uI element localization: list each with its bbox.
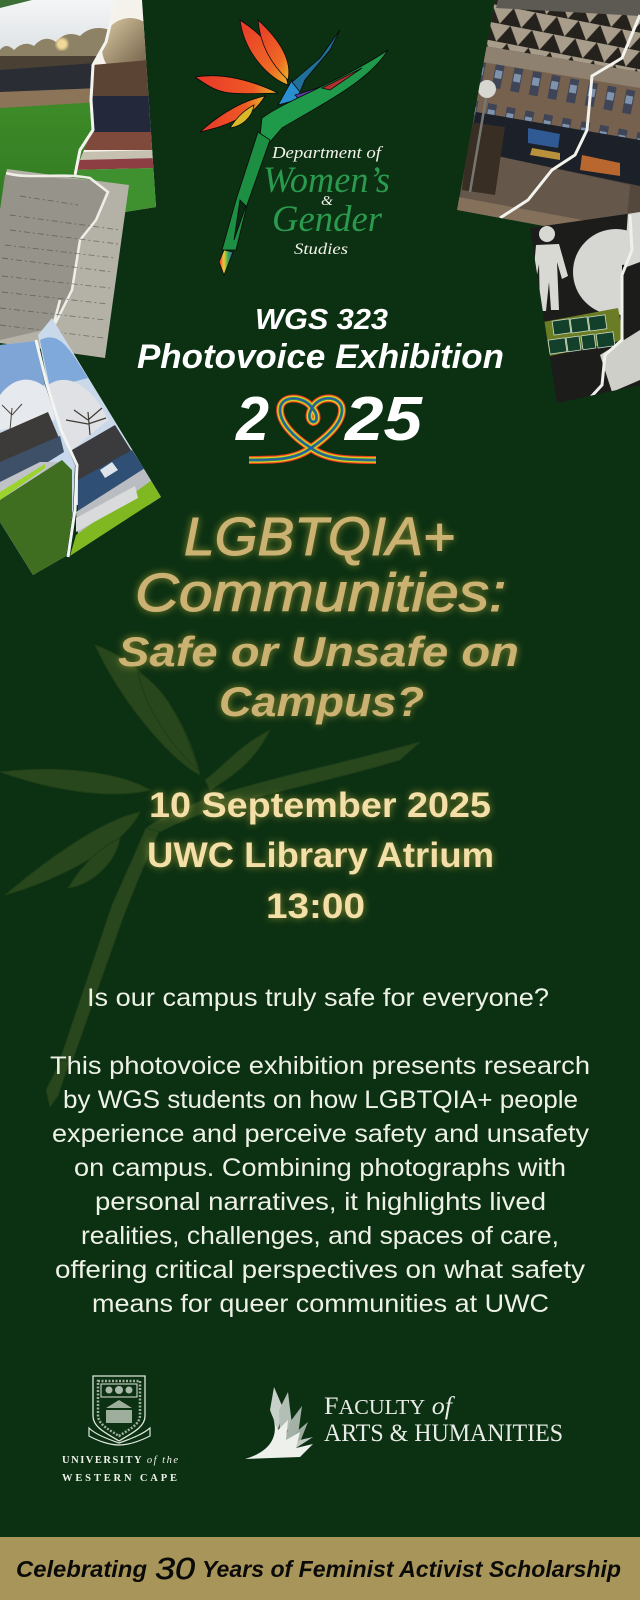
crowd [468, 112, 640, 186]
stadium right piece [70, 0, 160, 215]
text block: exhibition description: Is our campus truly safe for everyone? [87, 984, 549, 1012]
text block: exhibition description: on campus. Combining photographs with [74, 1154, 566, 1182]
photo: campus building torn collage [0, 315, 170, 585]
logo: bird of paradise pen: Women’s [263, 160, 390, 201]
footer banner [0, 1537, 640, 1600]
logo: bird of paradise pen: Studies [294, 241, 348, 258]
footer banner: Celebrating [16, 1556, 147, 1582]
event details: date, venue, time: 13:00 [266, 887, 365, 926]
building right piece [38, 318, 161, 556]
icon: rainbow heart ribbon [249, 398, 376, 460]
icon: flower and stem [195, 20, 388, 275]
headline: LGBTQIA+ Communities: Communities: [135, 563, 506, 623]
logo: bird of paradise pen: Gender [272, 199, 383, 240]
text block: exhibition description: personal narratives, it highlights lived [95, 1188, 546, 1216]
logo: Faculty of Arts and Humanities [245, 1387, 563, 1459]
logo text: Department of [271, 143, 384, 162]
stadium tear [75, 0, 115, 175]
icon: white wing [245, 1387, 313, 1459]
person icon [533, 226, 568, 311]
event details: date, venue, time: UWC Library Atrium [147, 836, 494, 875]
year 2025 with heart ribbon: 25 [344, 385, 424, 454]
map circle [573, 229, 640, 315]
green exit signs [543, 308, 624, 356]
year 2025 with heart ribbon: 2 [235, 385, 269, 454]
handwriting lines [0, 196, 120, 338]
text block: exhibition description: experience and perceive safety and unsafety [52, 1120, 590, 1148]
footer banner: 30 [155, 1551, 195, 1586]
building left piece [0, 341, 75, 575]
text block: exhibition description: realities, challenges, and spaces of care, [81, 1222, 559, 1250]
photo: stadium torn collage [0, 0, 160, 215]
photo: library atrium torn collage [457, 0, 640, 226]
map scrap [600, 330, 640, 392]
logo: Faculty of Arts and Humanities: FACULTY of [324, 1393, 455, 1420]
photo: handwritten note [0, 169, 129, 358]
event details: date, venue, time [147, 786, 494, 926]
building tear [36, 340, 77, 557]
icon: UWC crest [89, 1376, 150, 1445]
logo: University of the Western Cape: WESTERN CAPE [62, 1473, 177, 1484]
footer banner: Years of Feminist Activist Scholarship [202, 1556, 621, 1582]
text block: exhibition description: means for queer communities at UWC [92, 1290, 549, 1318]
logo: bird of paradise pen [195, 20, 390, 275]
photo: campus signage torn collage [525, 210, 640, 410]
subheadline: Safe or Unsafe on Campus?: Campus? [219, 678, 424, 725]
text block: exhibition description: by WGS students on how LGBTQIA+ people [63, 1086, 578, 1114]
decorative bamboo watermark [0, 645, 420, 1107]
text block: exhibition description [50, 984, 590, 1318]
year 2025 with heart ribbon [235, 385, 424, 460]
wall with windows [474, 48, 640, 140]
logo: Faculty of Arts and Humanities: ARTS & HUMANITIES [324, 1420, 563, 1447]
text block: exhibition description: offering critical perspectives on what safety [55, 1256, 586, 1284]
ceiling [484, 0, 640, 72]
logo: University of the Western Cape: UNIVERSITY of the [62, 1455, 178, 1466]
lamp [478, 80, 496, 98]
text block: exhibition description: This photovoice exhibition presents research [50, 1052, 590, 1080]
subheadline: Safe or Unsafe on Campus?: Safe or Unsafe on [118, 628, 519, 675]
headline: LGBTQIA+ Communities: LGBTQIA+ [184, 507, 455, 567]
headline: LGBTQIA+ Communities [135, 507, 506, 623]
logo: University of the Western Cape [62, 1376, 178, 1484]
floor [458, 156, 630, 226]
event details: date, venue, time: 10 September 2025 [149, 786, 491, 825]
title: Photovoice Exhibition: Photovoice Exhibition [137, 338, 504, 376]
logo: bird of paradise pen: & [321, 194, 333, 209]
subheadline: Safe or Unsafe on Campus? [118, 628, 519, 725]
stadium left piece [0, 0, 114, 209]
title: WGS 323: WGS 323 [255, 304, 388, 336]
